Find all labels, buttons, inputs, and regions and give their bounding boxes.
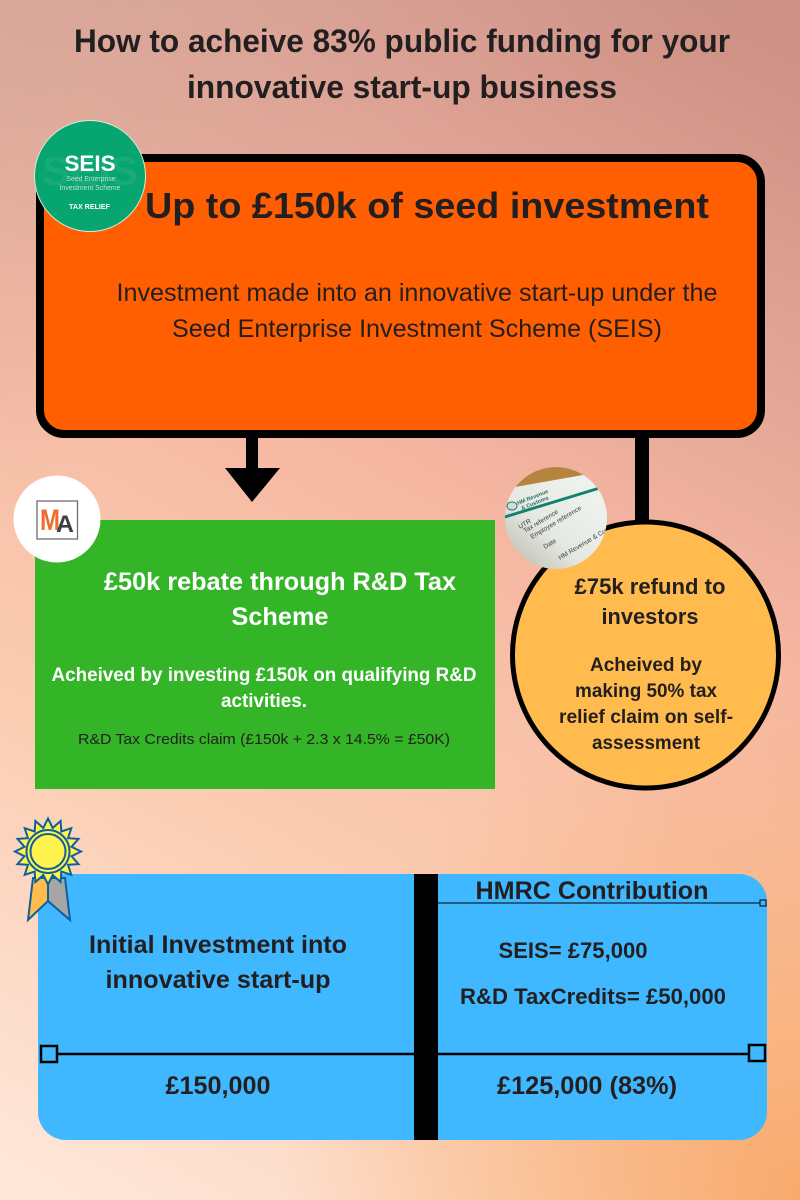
text: R&D claim formula: R&D Tax Credits claim (£150k + 2.3 x 14.5% = £50K) bbox=[78, 731, 450, 748]
icon: HMRC letter photo: HM Revenue & Customs bbox=[557, 518, 623, 562]
text: R&D contribution: R&D TaxCredits= £50,000 bbox=[460, 984, 726, 1009]
arrow: down to R&D box bbox=[225, 435, 280, 502]
heading: 75k refund: £75k refund to bbox=[574, 574, 726, 599]
icon: HMRC letter photo: Employee reference bbox=[529, 505, 583, 541]
text: R&D qualifying activities: Acheived by investing £150k on qualifying R&D bbox=[52, 665, 476, 686]
panel: R&D tax scheme bbox=[35, 520, 495, 789]
icon: SEIS tax relief badge: SEIS bbox=[42, 148, 138, 194]
divider: horizontal rule with handles bbox=[41, 900, 766, 1062]
text: initial investment heading: Initial Investment into bbox=[89, 931, 347, 959]
text: HMRC total: £125,000 (83%) bbox=[497, 1072, 677, 1100]
icon: HMRC letter photo: & Customs bbox=[521, 495, 550, 512]
text: tax relief claim: making 50% tax bbox=[575, 681, 717, 702]
heading: 75k refund bbox=[574, 574, 726, 629]
icon: HMRC letter photo: Tax reference bbox=[522, 508, 560, 535]
text: seed investment description: Seed Enterprise Investment Scheme (SEIS) bbox=[172, 315, 662, 343]
icon: MA logo: A bbox=[56, 511, 74, 538]
heading: R&D rebate bbox=[104, 568, 456, 631]
text: seed investment description: Investment made into an innovative start-up under the bbox=[116, 279, 718, 307]
panel: contribution table bbox=[38, 874, 767, 1140]
icon: SEIS tax relief badge: Seed Enterprise bbox=[66, 174, 116, 183]
text: initial investment heading bbox=[89, 931, 347, 994]
text: tax relief claim: relief claim on self- bbox=[559, 707, 733, 728]
title: innovative start-up business bbox=[187, 69, 617, 105]
title bbox=[74, 23, 730, 105]
icon: HMRC letter photo: HM Revenue bbox=[517, 489, 549, 507]
icon: HMRC letter photo bbox=[505, 467, 607, 569]
panel: seed investment bbox=[40, 158, 761, 434]
icon: SEIS tax relief badge: TAX RELIEF bbox=[69, 204, 111, 211]
panel: investor refund circle bbox=[512, 522, 778, 788]
text: initial investment total: £150,000 bbox=[166, 1072, 270, 1100]
text: tax relief claim bbox=[559, 655, 733, 754]
text: initial investment heading: innovative start-up bbox=[106, 966, 330, 994]
icon: HMRC letter photo: UTR bbox=[517, 518, 533, 531]
text: R&D qualifying activities bbox=[52, 665, 476, 712]
title: How to acheive 83% public funding for your bbox=[74, 23, 730, 59]
icon: HMRC letter photo: Date bbox=[542, 537, 558, 551]
icon: SEIS tax relief badge: Investment Scheme bbox=[60, 183, 120, 192]
icon: MA logo bbox=[14, 476, 100, 562]
text: seed investment description bbox=[116, 279, 718, 343]
text: tax relief claim: assessment bbox=[592, 733, 701, 754]
icon: award rosette bbox=[15, 818, 81, 920]
connector: to investor refund circle bbox=[635, 435, 649, 525]
text: SEIS contribution: SEIS= £75,000 bbox=[498, 938, 648, 963]
heading: R&D rebate: Scheme bbox=[232, 603, 329, 631]
heading: R&D rebate: £50k rebate through R&D Tax bbox=[104, 568, 456, 596]
heading: 75k refund: investors bbox=[602, 604, 698, 629]
heading: seed investment: Up to £150k of seed investment bbox=[145, 185, 709, 226]
icon: SEIS tax relief badge bbox=[34, 120, 146, 232]
text: R&D qualifying activities: activities. bbox=[221, 691, 307, 712]
icon: SEIS tax relief badge: SEIS bbox=[64, 151, 116, 176]
divider: vertical bar bbox=[414, 874, 438, 1140]
icon: MA logo: M bbox=[40, 504, 60, 537]
text: tax relief claim: Acheived by bbox=[590, 655, 702, 676]
text: HMRC contribution heading: HMRC Contribution bbox=[476, 877, 708, 905]
